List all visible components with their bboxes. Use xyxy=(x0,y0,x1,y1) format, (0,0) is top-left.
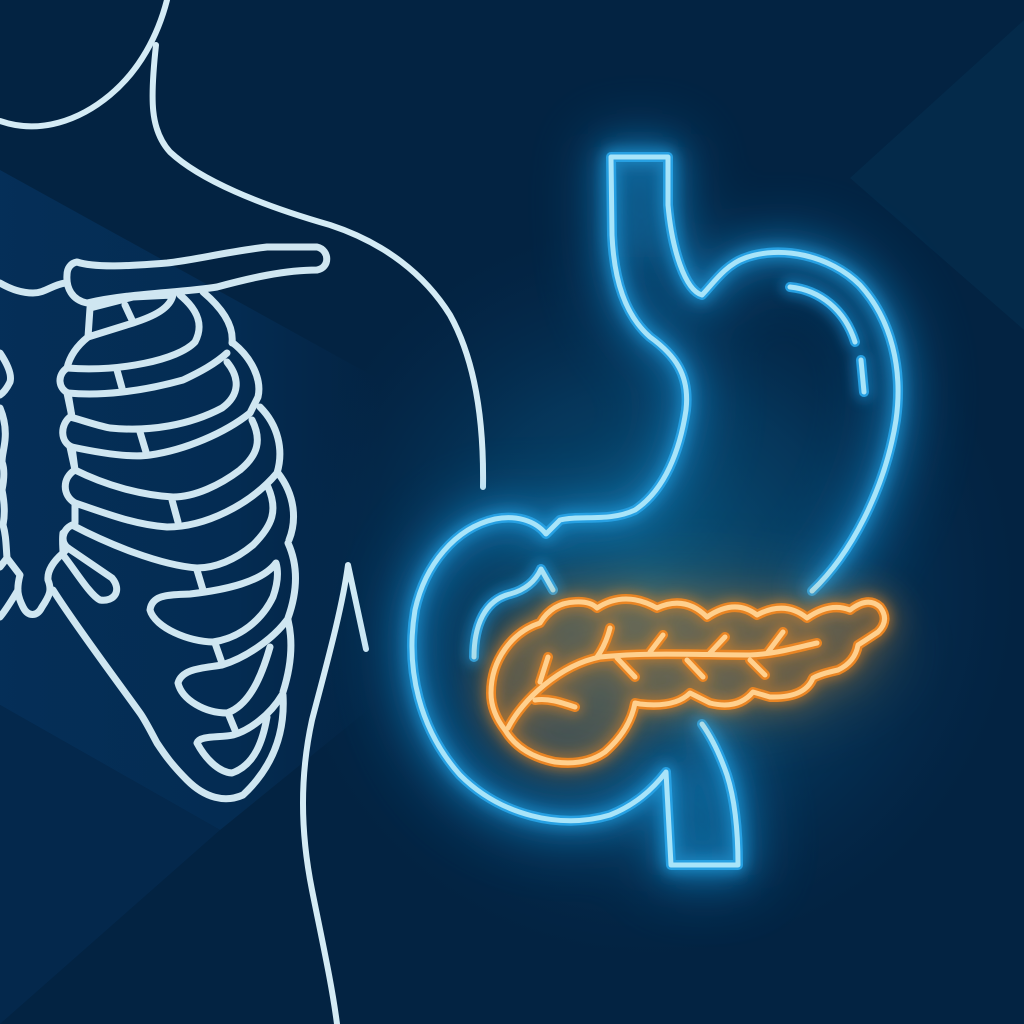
collar link xyxy=(0,283,65,293)
stomach xyxy=(412,157,898,865)
neck and jaw line xyxy=(0,0,167,126)
upper rib xyxy=(88,295,173,337)
rib 7 xyxy=(178,620,291,713)
waist line xyxy=(303,565,366,1024)
rib 4 xyxy=(65,407,280,527)
rib 5 xyxy=(63,473,294,600)
xiphoid xyxy=(0,548,68,617)
neck to shoulder line xyxy=(153,45,483,487)
clavicle xyxy=(67,247,327,303)
sternum edge xyxy=(63,393,75,553)
lower costal margin xyxy=(53,590,283,799)
spine edge xyxy=(0,353,11,558)
rib 2 xyxy=(60,292,232,394)
rib 6 xyxy=(150,543,296,642)
pancreas xyxy=(491,599,885,763)
stomach inner folds xyxy=(474,287,864,657)
rib cage xyxy=(0,247,327,799)
body outline xyxy=(0,0,483,1024)
rib 8 xyxy=(197,695,282,773)
rib 3 xyxy=(63,343,259,456)
